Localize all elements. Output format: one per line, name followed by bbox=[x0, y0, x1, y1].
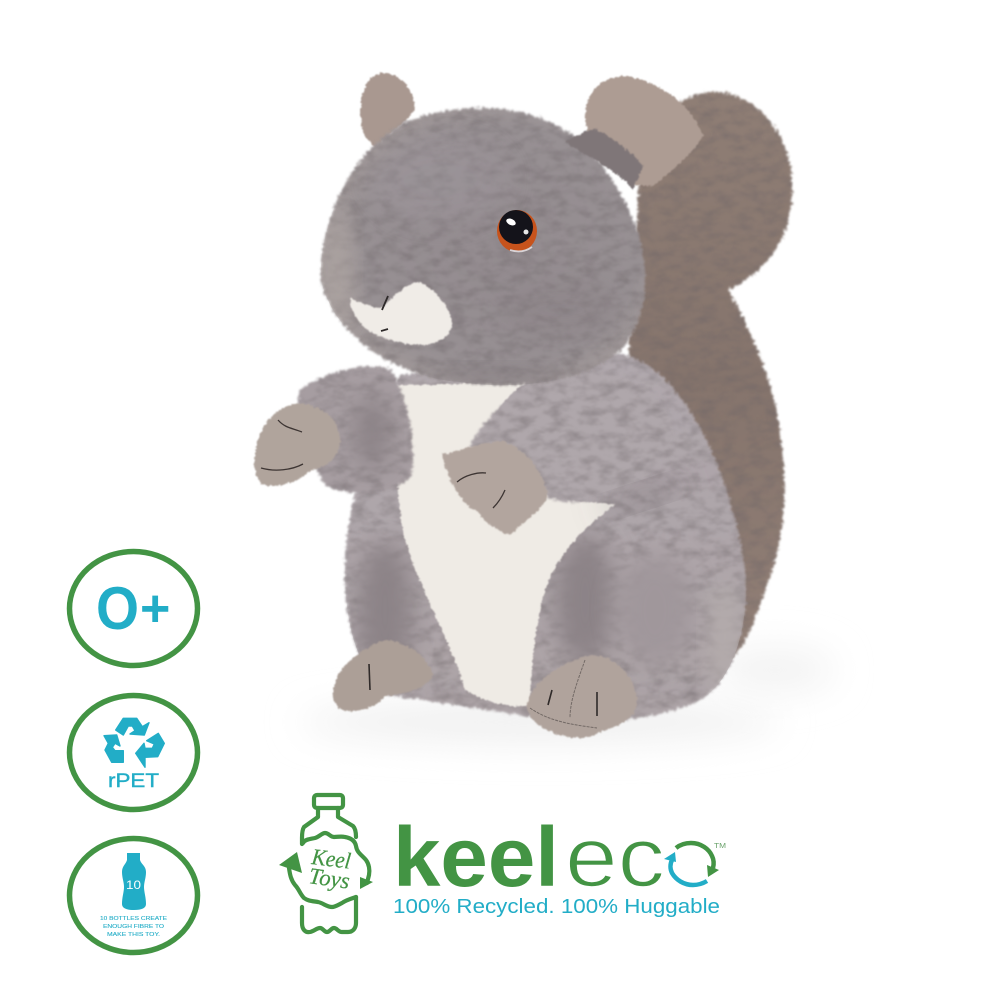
logo: Keel Toys wordmark bbox=[307, 844, 352, 894]
right arm bbox=[470, 369, 685, 514]
white belly bbox=[390, 372, 615, 706]
head bbox=[321, 108, 645, 388]
age badge 0+ bbox=[70, 552, 198, 666]
logo: keeleco wordmark: ec bbox=[565, 810, 665, 904]
infographic canvas bbox=[66, 72, 804, 956]
bottle badge bbox=[70, 838, 198, 952]
age text: O bbox=[96, 575, 139, 642]
body bbox=[345, 352, 746, 721]
rPET label: rPET bbox=[108, 771, 159, 792]
left foot bbox=[333, 640, 433, 711]
eye bbox=[497, 210, 537, 252]
trademark: TM bbox=[714, 841, 726, 850]
squirrel plush toy bbox=[254, 73, 792, 738]
icon: bottle bbox=[122, 853, 146, 910]
left arm bbox=[298, 366, 413, 493]
right ear bbox=[565, 76, 703, 190]
bottle caption: MAKE THIS TOY. bbox=[107, 932, 160, 938]
logo: tagline: 100% Recycled. 100% Huggable bbox=[393, 895, 720, 918]
tail bbox=[620, 92, 792, 665]
right foot bbox=[527, 655, 637, 738]
logo: recycled bottle bbox=[279, 795, 373, 932]
logo: eco arrows bbox=[664, 843, 719, 885]
age text: + bbox=[140, 580, 170, 638]
floor shadow bbox=[300, 648, 835, 742]
logo: keeleco wordmark: keel bbox=[393, 810, 559, 904]
left paw bbox=[254, 404, 340, 486]
bottle caption: 10 BOTTLES CREATE bbox=[100, 916, 167, 922]
bottle number: 10 bbox=[126, 880, 141, 892]
right paw bbox=[442, 441, 548, 535]
bottle caption bbox=[100, 916, 167, 938]
rPET badge bbox=[70, 696, 198, 810]
snout bbox=[350, 282, 452, 345]
icon: recycle arrows bbox=[104, 718, 164, 767]
logo: keeleco wordmark bbox=[393, 810, 726, 904]
logo: Keel Toys wordmark: Toys bbox=[307, 863, 351, 894]
logo: Keel Toys wordmark: Keel bbox=[309, 844, 352, 874]
left ear bbox=[361, 73, 414, 148]
bottle caption: ENOUGH FIBRE TO bbox=[103, 924, 165, 930]
